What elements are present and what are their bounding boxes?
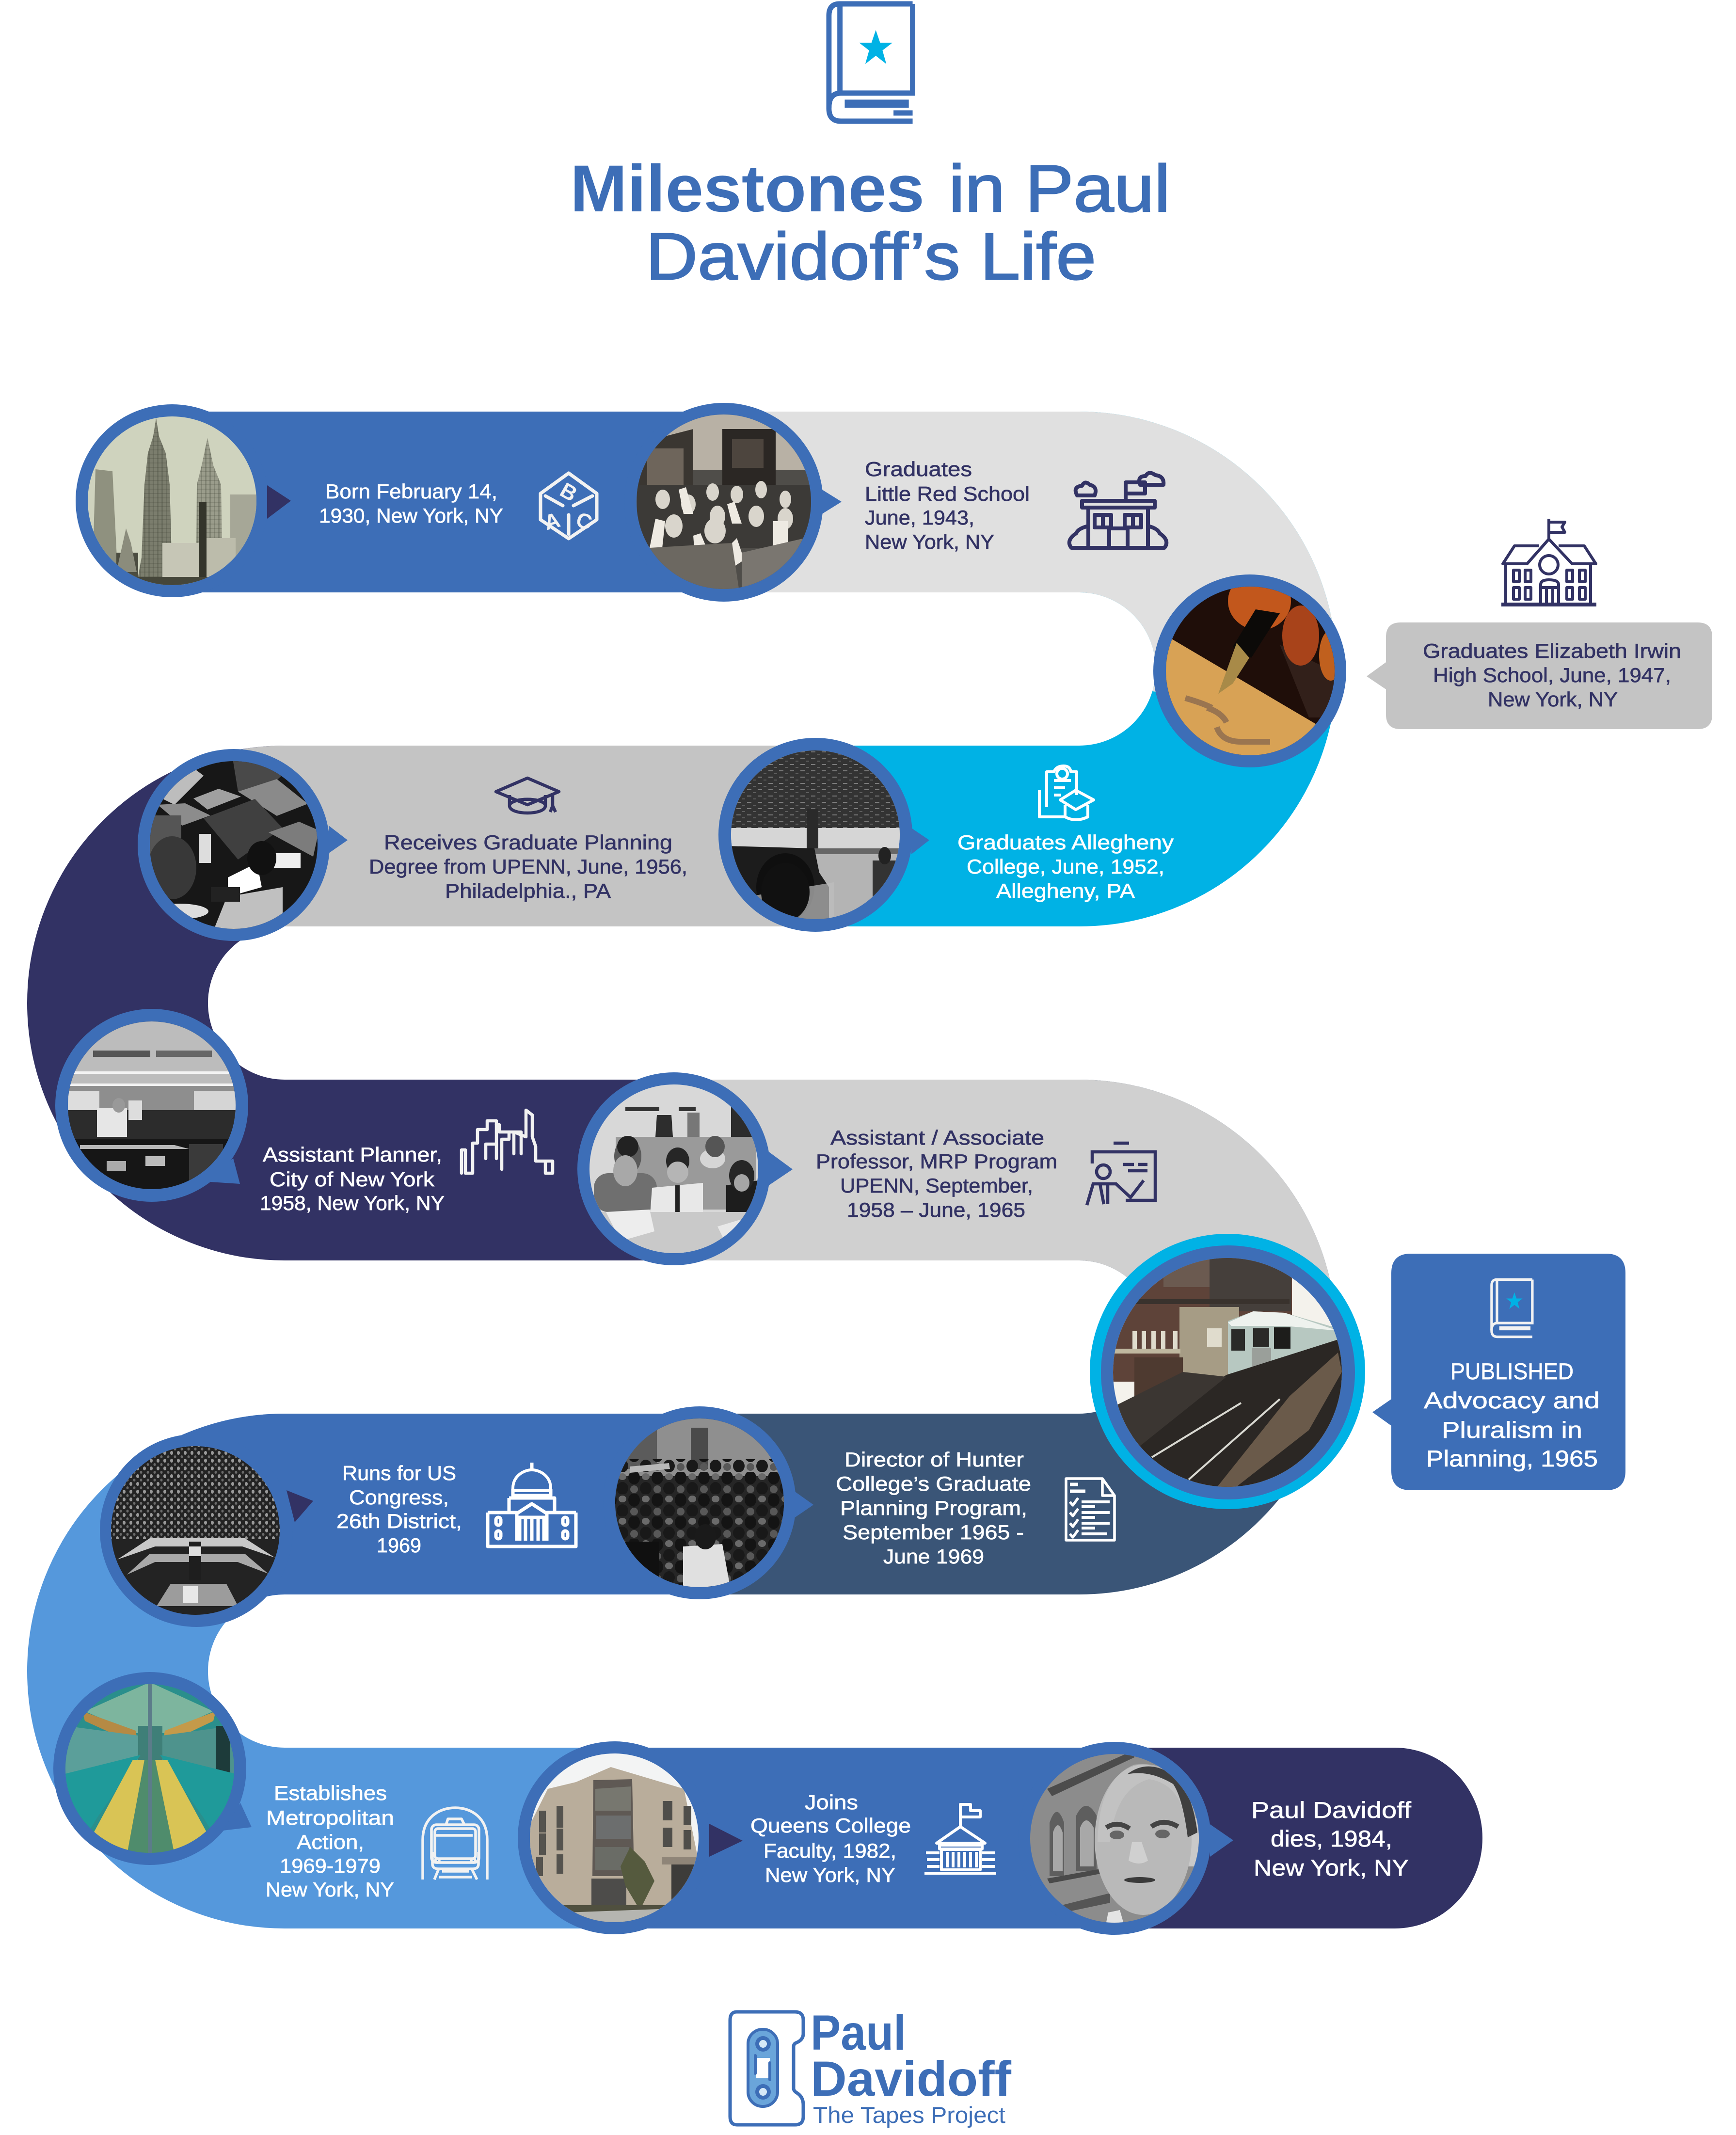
text: born bbox=[319, 480, 503, 527]
text: born: Born February 14, bbox=[325, 480, 497, 503]
icon: ABC block: B bbox=[556, 478, 581, 507]
text: professor: 1958 – June, 1965 bbox=[847, 1198, 1025, 1221]
text: Little Red School: Graduates bbox=[865, 458, 972, 480]
title bbox=[570, 152, 1170, 294]
title: in Paul bbox=[949, 152, 1170, 226]
icon: ABC block bbox=[541, 473, 597, 539]
text: planner bbox=[260, 1143, 445, 1214]
icon: diploma and cap bbox=[1039, 766, 1094, 820]
text: dies: New York, NY bbox=[1254, 1855, 1409, 1880]
milestone: dies 1984 bbox=[1018, 1742, 1412, 1935]
milestone: born 1930 bbox=[76, 404, 597, 597]
text: Congress bbox=[336, 1462, 462, 1557]
text: Allegheny: Allegheny, PA bbox=[996, 879, 1135, 902]
icon: capitol building bbox=[488, 1463, 576, 1546]
photo: House chamber bbox=[100, 1434, 313, 1627]
text: planner: City of New York bbox=[270, 1168, 435, 1191]
logo: Paul Davidoff The Tapes Project bbox=[730, 2005, 1012, 2128]
milestone: runs for Congress bbox=[100, 1434, 576, 1627]
text: Little Red School: Little Red School bbox=[865, 482, 1030, 505]
winding timeline ribbon bbox=[117, 412, 1482, 1928]
photo: fountain pen writing bbox=[1153, 572, 1346, 767]
text: Hunter: Director of Hunter bbox=[844, 1448, 1024, 1471]
photo: subway car interior bbox=[53, 1672, 252, 1865]
text: professor bbox=[816, 1126, 1057, 1221]
callout: Elizabeth Irwin: Graduates Elizabeth Irwin bbox=[1423, 639, 1681, 662]
text: professor: UPENN, September, bbox=[840, 1174, 1033, 1197]
text: UPENN degree bbox=[369, 831, 687, 902]
text: Allegheny bbox=[957, 831, 1174, 902]
text: professor: Professor, MRP Program bbox=[816, 1150, 1057, 1173]
text: UPENN degree: Philadelphia., PA bbox=[445, 879, 611, 902]
icon: schoolhouse bbox=[1501, 519, 1596, 605]
milestone: Elizabeth Irwin bbox=[1153, 519, 1712, 767]
text: planner: 1958, New York, NY bbox=[260, 1192, 445, 1214]
text: dies: dies, 1984, bbox=[1271, 1826, 1392, 1851]
milestone: Allegheny College bbox=[718, 738, 1174, 932]
text: Little Red School: New York, NY bbox=[865, 530, 994, 553]
milestone: UPENN professor bbox=[577, 1072, 1155, 1265]
callout: Elizabeth Irwin: New York, NY bbox=[1488, 688, 1618, 711]
text: Metropolitan Action: Metropolitan bbox=[266, 1806, 394, 1829]
icon: ABC block: C bbox=[573, 508, 595, 535]
text: planner: Assistant Planner, bbox=[263, 1143, 442, 1166]
text: Queens College: Faculty, 1982, bbox=[764, 1839, 896, 1862]
text: Metropolitan Action: Establishes bbox=[274, 1782, 387, 1804]
icon: teacher at board bbox=[1087, 1143, 1155, 1205]
milestone: Hunter College subway photo and publication bbox=[1090, 1234, 1625, 1509]
text: born: 1930, New York, NY bbox=[319, 504, 503, 527]
icon: small book bbox=[1492, 1279, 1532, 1337]
photo: crowded auditorium bbox=[603, 1406, 813, 1599]
icon: train in tunnel bbox=[423, 1808, 487, 1880]
text: Little Red School: June, 1943, bbox=[865, 506, 974, 529]
milestone: Metropolitan Action bbox=[53, 1672, 487, 1901]
milestone: Little Red School bbox=[624, 403, 1166, 602]
callout: PUBLISHED: Advocacy and bbox=[1424, 1387, 1600, 1413]
photo: Manhattan skyline bbox=[76, 404, 291, 597]
photo: graduation caps bbox=[138, 749, 348, 941]
text: Metropolitan Action bbox=[266, 1782, 394, 1901]
icon: graduation cap bbox=[496, 778, 559, 813]
text: Metropolitan Action: 1969-1979 bbox=[280, 1854, 381, 1877]
callout: PUBLISHED bbox=[1372, 1254, 1625, 1490]
icon: book with star bbox=[829, 4, 913, 121]
milestone: Hunter College director bbox=[603, 1406, 1115, 1599]
callout: Elizabeth Irwin: High School, June, 1947, bbox=[1433, 664, 1671, 686]
logo: Paul Davidoff The Tapes Project: Davidoff bbox=[811, 2051, 1012, 2106]
callout: Elizabeth Irwin bbox=[1367, 622, 1712, 729]
milestone: Queens College bbox=[518, 1741, 996, 1934]
title: Davidoff’s Life bbox=[646, 220, 1096, 294]
photo: lecture hall blackboard bbox=[718, 738, 929, 932]
text: Hunter: June 1969 bbox=[883, 1545, 984, 1568]
text: Hunter: September 1965 - bbox=[843, 1521, 1024, 1544]
icon: checklist bbox=[1066, 1479, 1115, 1540]
milestone: UPENN degree bbox=[138, 749, 687, 941]
text: Queens College: New York, NY bbox=[765, 1864, 895, 1886]
logo: Paul Davidoff The Tapes Project: The Tapes Project bbox=[813, 2102, 1005, 2128]
text: dies: Paul Davidoff bbox=[1251, 1797, 1412, 1823]
photo: Queens College building bbox=[518, 1741, 743, 1934]
text: Metropolitan Action: Action, bbox=[297, 1831, 364, 1853]
photo: elevated subway train bbox=[1090, 1234, 1365, 1509]
text: Queens College: Joins bbox=[805, 1791, 858, 1814]
milestone: City of New York planner bbox=[55, 1009, 553, 1214]
text: Little Red School bbox=[865, 458, 1030, 553]
text: UPENN degree: Receives Graduate Planning bbox=[384, 831, 672, 854]
title: Milestones bbox=[570, 152, 924, 226]
callout: PUBLISHED: Planning, 1965 bbox=[1426, 1446, 1598, 1471]
photo: classroom bbox=[624, 403, 842, 602]
text: dies bbox=[1251, 1797, 1412, 1880]
text: Allegheny: College, June, 1952, bbox=[967, 855, 1164, 878]
callout: PUBLISHED: Pluralism in bbox=[1442, 1417, 1582, 1443]
icon: college building with flag bbox=[924, 1804, 996, 1873]
text: Congress: 1969 bbox=[377, 1534, 421, 1557]
callout: PUBLISHED: PUBLISHED bbox=[1450, 1358, 1574, 1384]
logo: Paul Davidoff The Tapes Project: Paul bbox=[811, 2005, 906, 2060]
icon: city skyline bbox=[462, 1110, 553, 1173]
text: Congress: Congress, bbox=[349, 1486, 449, 1509]
text: Hunter: College’s Graduate bbox=[836, 1472, 1031, 1495]
text: Hunter bbox=[836, 1448, 1031, 1568]
text: UPENN degree: Degree from UPENN, June, 1956, bbox=[369, 855, 687, 878]
photo: portrait of Paul Davidoff bbox=[1018, 1742, 1233, 1935]
text: professor: Assistant / Associate bbox=[830, 1126, 1044, 1149]
photo: planning office bbox=[55, 1009, 248, 1202]
icon: ABC block: A bbox=[542, 508, 563, 535]
text: Allegheny: Graduates Allegheny bbox=[957, 831, 1174, 854]
text: Queens College bbox=[750, 1791, 911, 1886]
text: Hunter: Planning Program, bbox=[840, 1497, 1027, 1519]
icon: school with clouds bbox=[1069, 473, 1166, 548]
text: Congress: Runs for US bbox=[342, 1462, 456, 1484]
icon: cassette tape bbox=[730, 2012, 803, 2125]
text: Metropolitan Action: New York, NY bbox=[266, 1878, 394, 1901]
photo: seminar students bbox=[577, 1072, 793, 1265]
text: Queens College: Queens College bbox=[750, 1814, 911, 1837]
text: Congress: 26th District, bbox=[336, 1510, 462, 1532]
